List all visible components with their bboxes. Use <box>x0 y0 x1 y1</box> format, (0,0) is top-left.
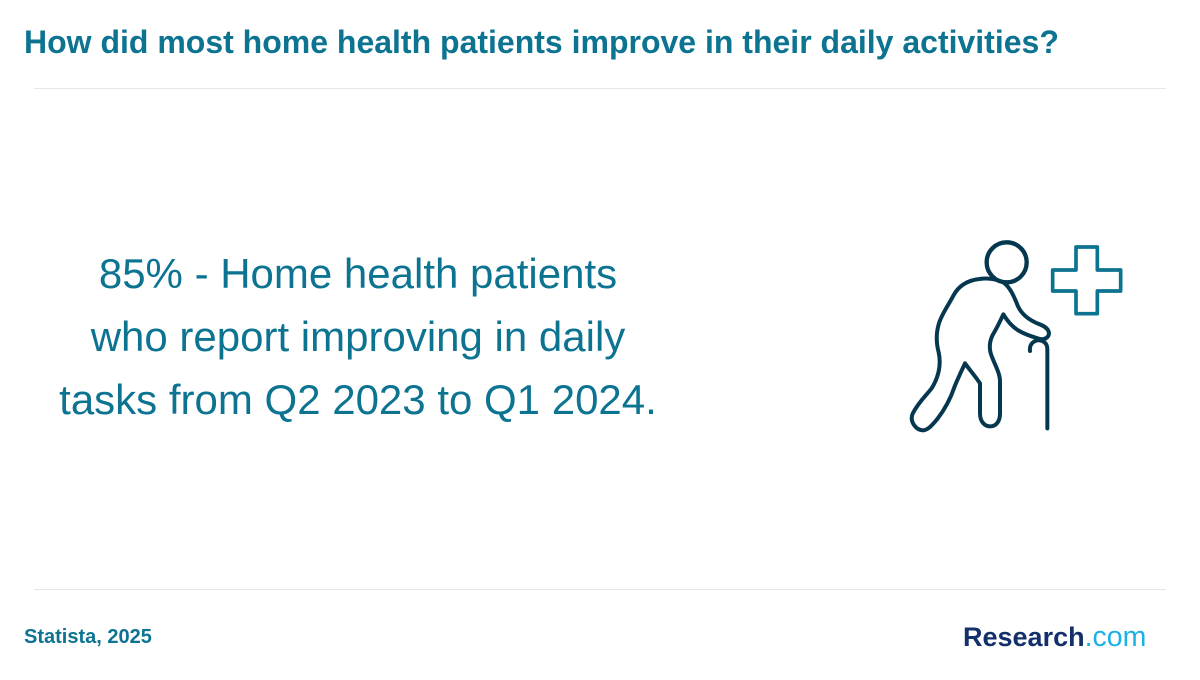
source note: Statista, 2025 <box>24 626 152 648</box>
icon: head <box>987 242 1027 282</box>
title: How did most home health patients improve in their daily activities? <box>24 24 1059 60</box>
main statistic text: who report improving in daily <box>91 313 625 360</box>
icon: medical cross <box>1053 247 1121 314</box>
icon: elderly person with cane and medical cross <box>910 240 1122 432</box>
main statistic text <box>59 250 657 423</box>
logo: Research.com: Research.com <box>963 621 1146 653</box>
icon: body <box>912 278 1049 430</box>
icon: cane <box>1030 340 1047 428</box>
main statistic text: 85% - Home health patients <box>99 250 617 297</box>
main statistic text: tasks from Q2 2023 to Q1 2024. <box>59 376 657 423</box>
